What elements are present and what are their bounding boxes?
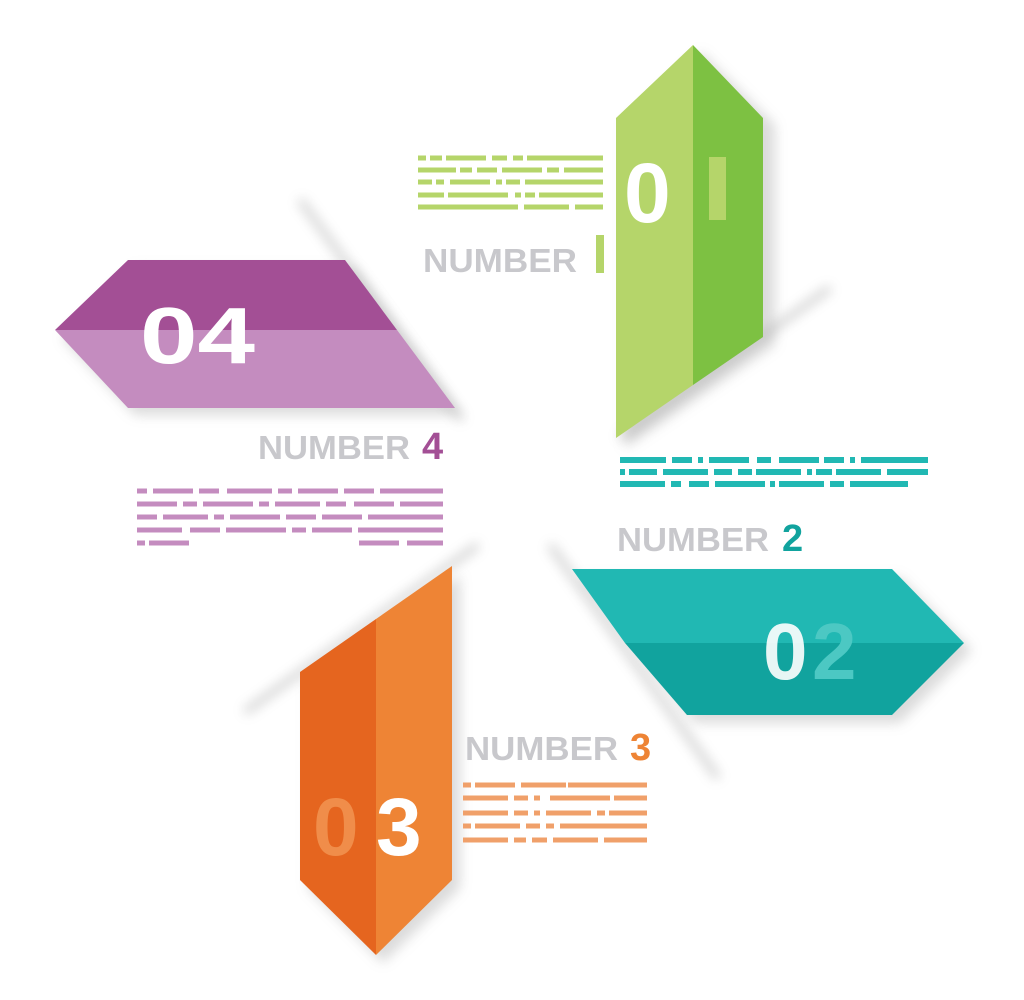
number 04: 04 [140, 291, 256, 380]
label: NUMBER 2: NUMBER [617, 521, 769, 558]
number 03: 0 [313, 782, 359, 873]
arrow 04 purple [55, 260, 460, 415]
label: NUMBER 4 [258, 426, 443, 468]
arrow 01 green [616, 45, 775, 448]
number 03: 3 [376, 782, 422, 873]
slit shadows [245, 200, 830, 778]
label: NUMBER 3: NUMBER [465, 730, 618, 767]
label: NUMBER 3: 3 [630, 727, 651, 769]
number 02 [763, 607, 856, 696]
label: NUMBER 3 [465, 727, 651, 769]
number 03 [313, 782, 422, 873]
label: NUMBER 2 [617, 518, 803, 560]
arrow 02 teal [572, 569, 972, 723]
number 01: 0 [624, 146, 671, 240]
arrow 03 orange [300, 566, 460, 963]
label: NUMBER 1: NUMBER [423, 242, 577, 279]
text block 4 [137, 491, 443, 543]
label: NUMBER 1 [423, 235, 604, 279]
number 02: 0 [763, 607, 808, 696]
number 02: 2 [812, 607, 856, 696]
label: NUMBER 4: 4 [422, 426, 443, 468]
label: NUMBER 2: 2 [782, 518, 803, 560]
number 01 [624, 146, 726, 240]
text block 3 [463, 785, 647, 840]
label: NUMBER 4: NUMBER [258, 429, 410, 466]
text block 2 [620, 460, 928, 484]
text block 1 [418, 158, 603, 207]
